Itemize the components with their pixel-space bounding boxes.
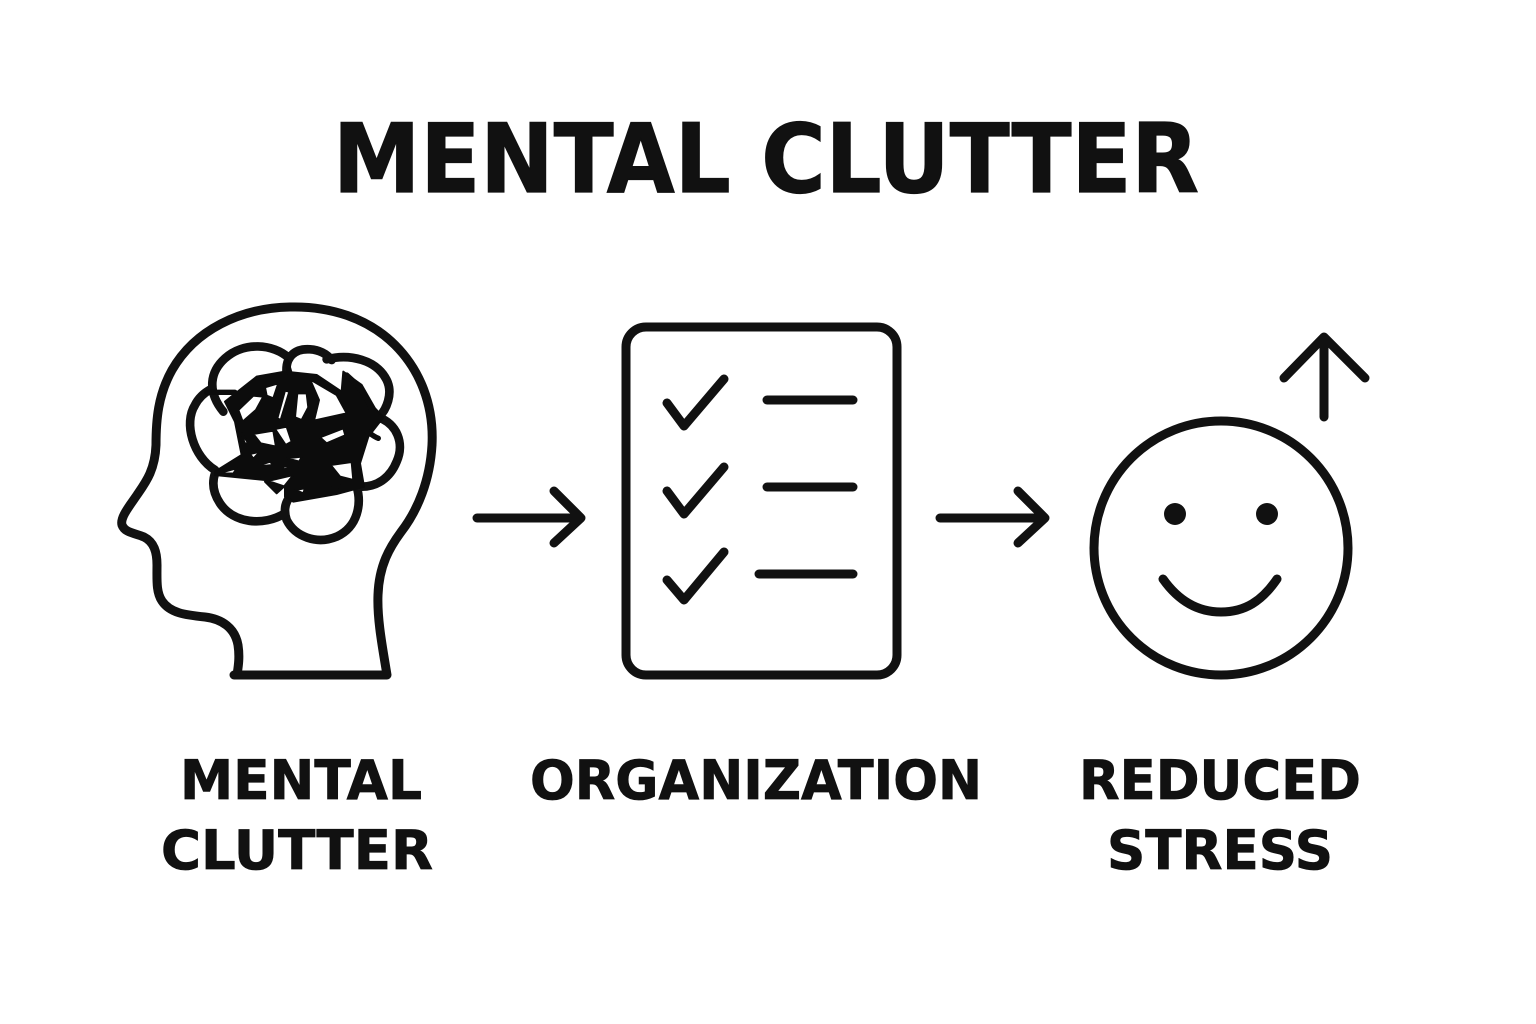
up arrow [1284, 337, 1365, 417]
icon: checklist [626, 327, 897, 675]
label: reduced stress [1079, 749, 1361, 882]
label: reduced stress: REDUCED [1079, 749, 1361, 812]
smile [1163, 579, 1277, 612]
arrow: organization to reduced stress [940, 491, 1045, 543]
label: reduced stress: STRESS [1107, 819, 1333, 882]
page [626, 327, 897, 675]
tangle loops [190, 346, 400, 540]
left eye [1164, 503, 1186, 525]
icon: head with tangled thoughts [122, 307, 432, 675]
label: mental clutter [161, 749, 433, 882]
tangle scribble [207, 362, 383, 502]
label: mental clutter: CLUTTER [161, 819, 433, 882]
title: MENTAL CLUTTER [333, 105, 1199, 215]
face [1094, 421, 1348, 675]
check item 2 [667, 467, 853, 514]
head outline [122, 307, 432, 675]
check item 1 [667, 379, 853, 426]
right eye [1256, 503, 1278, 525]
check item 3 [667, 552, 853, 600]
label: mental clutter: MENTAL [180, 749, 422, 812]
icon: smiling face with up arrow [1094, 337, 1365, 675]
arrow: clutter to organization [477, 491, 581, 543]
label: organization: ORGANIZATION [530, 749, 982, 812]
